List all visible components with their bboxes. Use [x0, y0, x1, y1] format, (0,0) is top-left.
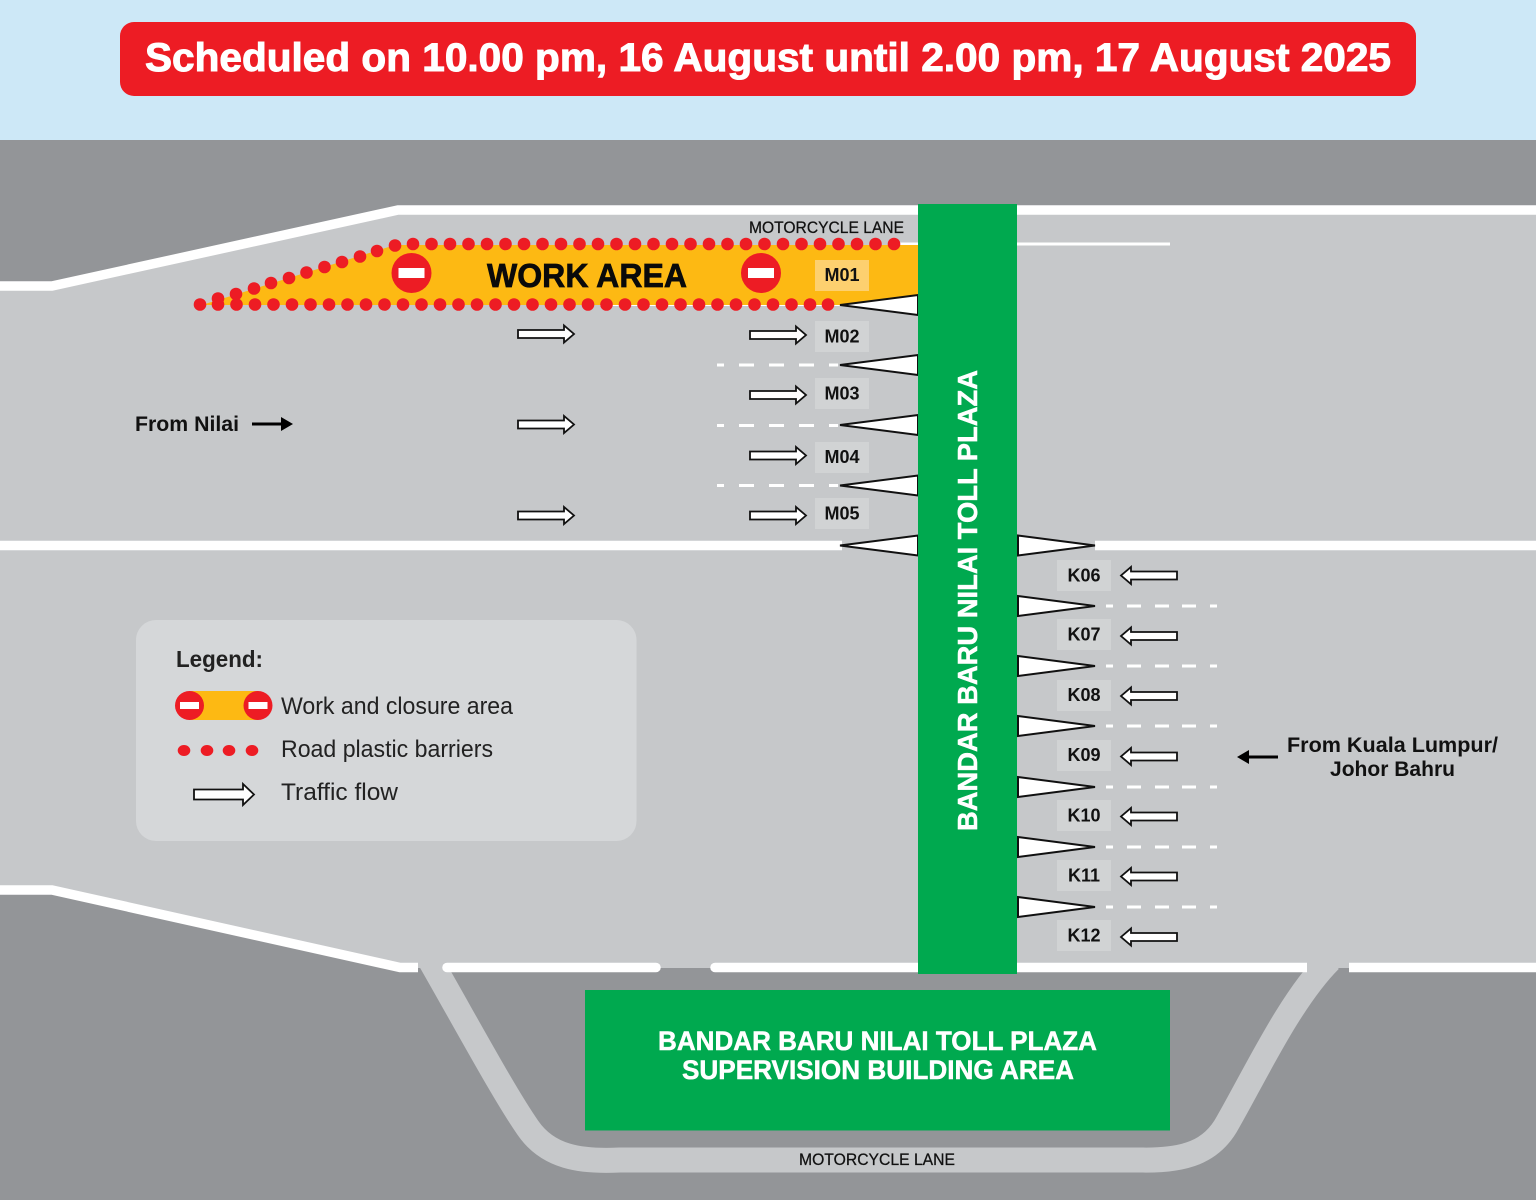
- label: motorcycle lane top: MOTORCYCLE LANE: [749, 219, 904, 237]
- lane labels: M01 to M05: M02: [824, 326, 860, 346]
- lane labels: K06 to K12: K06: [1067, 566, 1101, 586]
- legend heading: Legend:: [176, 646, 263, 672]
- lane labels: K06 to K12: K11: [1068, 866, 1100, 886]
- direction: from Kuala Lumpur / Johor Bahru: Johor Bahru: [1330, 758, 1455, 781]
- lane dividers: eastbound toll islands: [1018, 536, 1095, 917]
- road plastic barriers: [194, 238, 900, 310]
- supervision building: [585, 990, 1170, 1130]
- direction: from Kuala Lumpur / Johor Bahru: [1237, 734, 1498, 781]
- legend text: traffic flow: Traffic flow: [281, 779, 399, 806]
- supervision building: BANDAR BARU NILAI TOLL PLAZA: [658, 1026, 1097, 1056]
- banner: schedule: Scheduled on 10.00 pm, 16 August until 2.00 pm, 17 August 2025: [145, 36, 1391, 80]
- supervision building: SUPERVISION BUILDING AREA: [682, 1055, 1074, 1085]
- direction: from Nilai: From Nilai: [135, 413, 239, 436]
- toll plaza column: [918, 204, 1017, 974]
- lane labels: M01 to M05: M04: [824, 447, 860, 467]
- legend icon: work and closure: [175, 691, 272, 720]
- direction: from Nilai: [135, 413, 293, 436]
- road surface: [0, 209, 1536, 968]
- label: motorcycle lane bottom: MOTORCYCLE LANE: [799, 1151, 955, 1169]
- direction: from Kuala Lumpur / Johor Bahru: From Kuala Lumpur/: [1287, 734, 1498, 757]
- legend text: barriers: Road plastic barriers: [281, 736, 493, 763]
- lane dashes: [717, 365, 1217, 907]
- panel: legend: [136, 620, 636, 841]
- legend icon: traffic flow: [194, 784, 254, 805]
- road edge lines: [0, 210, 1536, 968]
- traffic flow arrows: rightward: [518, 326, 806, 524]
- motorcycle lane divider line: [600, 244, 1170, 304]
- label: work area: WORK AREA: [487, 257, 687, 294]
- traffic flow arrows: leftward: [1121, 567, 1177, 946]
- legend text: work and closure: Work and closure area: [281, 693, 514, 720]
- legend icon: barriers: [178, 745, 258, 756]
- label: toll plaza name: BANDAR BARU NILAI TOLL PLAZA: [952, 370, 983, 831]
- lane labels: K06 to K12: K07: [1067, 624, 1101, 644]
- sky background: [0, 0, 1536, 140]
- banner: schedule: [120, 22, 1416, 96]
- icon: no entry signs: [392, 253, 781, 293]
- motorcycle lane loop: [430, 960, 1330, 1160]
- lane dividers: westbound toll islands: [840, 295, 918, 556]
- lane labels: K06 to K12: K09: [1067, 745, 1101, 765]
- lane labels: K06 to K12: K10: [1067, 806, 1101, 826]
- lane labels: M01 to M05: M03: [824, 384, 860, 404]
- lane labels: M01 to M05: [815, 260, 869, 529]
- work area zone: [205, 245, 918, 305]
- lane labels: K06 to K12: K12: [1067, 926, 1101, 946]
- lane labels: M01 to M05: M05: [824, 504, 860, 524]
- lane labels: M01 to M05: M01: [824, 265, 860, 285]
- lane labels: K06 to K12: K08: [1067, 685, 1101, 705]
- lane labels: K06 to K12: [1057, 560, 1111, 951]
